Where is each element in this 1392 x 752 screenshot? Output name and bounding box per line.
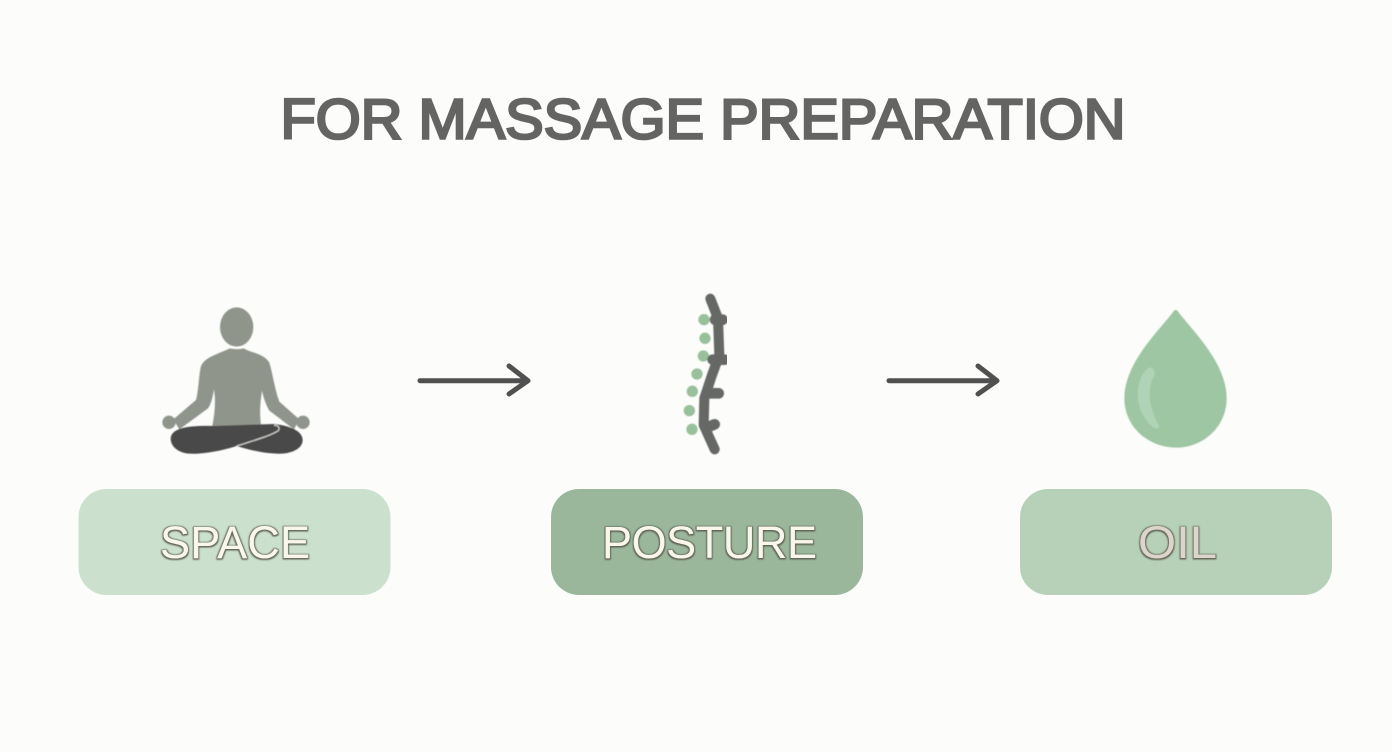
arrow: space to posture <box>420 366 528 394</box>
panel: oil <box>1020 489 1332 595</box>
arrow: posture to oil <box>889 366 997 394</box>
panel: space <box>78 489 390 595</box>
label: posture: POSTURE <box>602 517 817 568</box>
icon: meditating person <box>162 307 310 454</box>
panel: posture <box>551 489 863 595</box>
title: FOR MASSAGE PREPARATION <box>280 88 1126 152</box>
icon: spine with dots <box>684 299 725 449</box>
label: oil: OIL <box>1138 517 1217 568</box>
label: space: SPACE <box>160 517 310 568</box>
icon: oil drop <box>1124 310 1227 448</box>
